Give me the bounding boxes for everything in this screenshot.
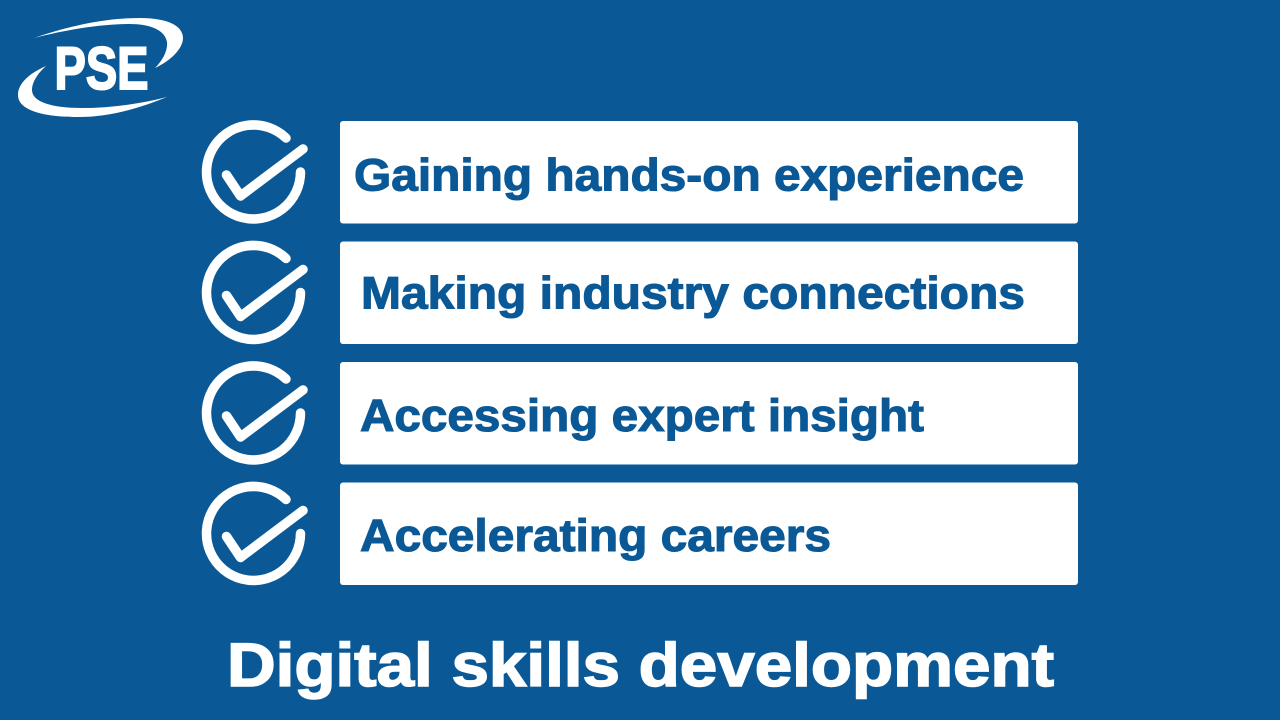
- item 4: [340, 482, 1078, 585]
- item 1: [340, 121, 1078, 224]
- item 1: Gaining hands-on experience: [354, 150, 1024, 200]
- icon: check 2: [207, 245, 303, 339]
- item 3: Accessing expert insight: [360, 390, 924, 441]
- item 4: Accelerating careers: [360, 510, 831, 561]
- item 2: Making industry connections: [361, 268, 1025, 318]
- icon: check 1: [207, 125, 303, 219]
- item 3: [340, 362, 1078, 464]
- item 2: [340, 242, 1078, 344]
- icon: check 4: [207, 486, 303, 580]
- logo: PSE: [18, 18, 183, 117]
- icon: check 3: [207, 366, 303, 460]
- title: Digital skills development: [227, 631, 1054, 699]
- logo: PSE: PSE: [54, 35, 148, 102]
